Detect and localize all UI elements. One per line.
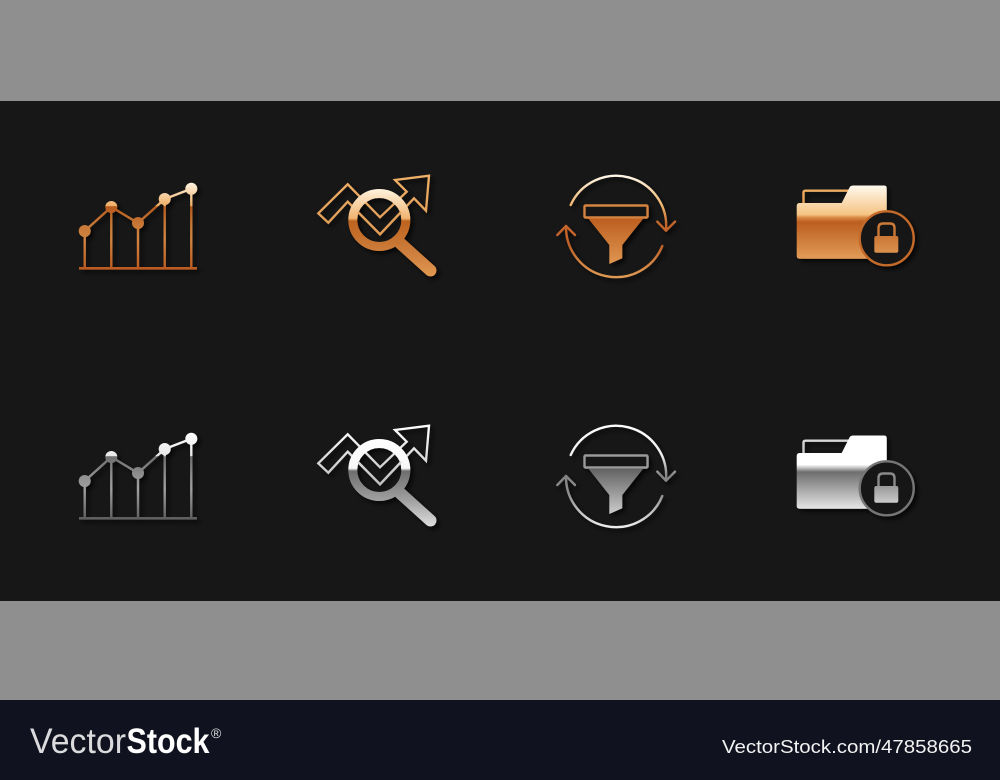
icon: gold folder with padlock [797, 186, 914, 265]
footer logo: Vector [30, 722, 126, 761]
icon: gold line chart [79, 183, 197, 270]
padlock badge [860, 211, 914, 265]
icon: gold magnifier over trend arrow [318, 176, 430, 270]
panel: dark icon background [0, 101, 1000, 601]
icon: silver funnel with cycle arrows [557, 426, 675, 527]
footer logo [30, 722, 222, 761]
padlock badge [860, 461, 914, 515]
footer image id: VectorStock.com/47858665 [722, 736, 972, 757]
icon: silver folder with padlock [797, 436, 914, 515]
icon: gold funnel with cycle arrows [557, 176, 675, 277]
footer bar [0, 700, 1000, 780]
footer logo: ® [211, 725, 222, 741]
icon: silver line chart [79, 433, 197, 520]
icon: silver magnifier over trend arrow [318, 426, 430, 520]
footer logo: Stock [126, 722, 210, 761]
